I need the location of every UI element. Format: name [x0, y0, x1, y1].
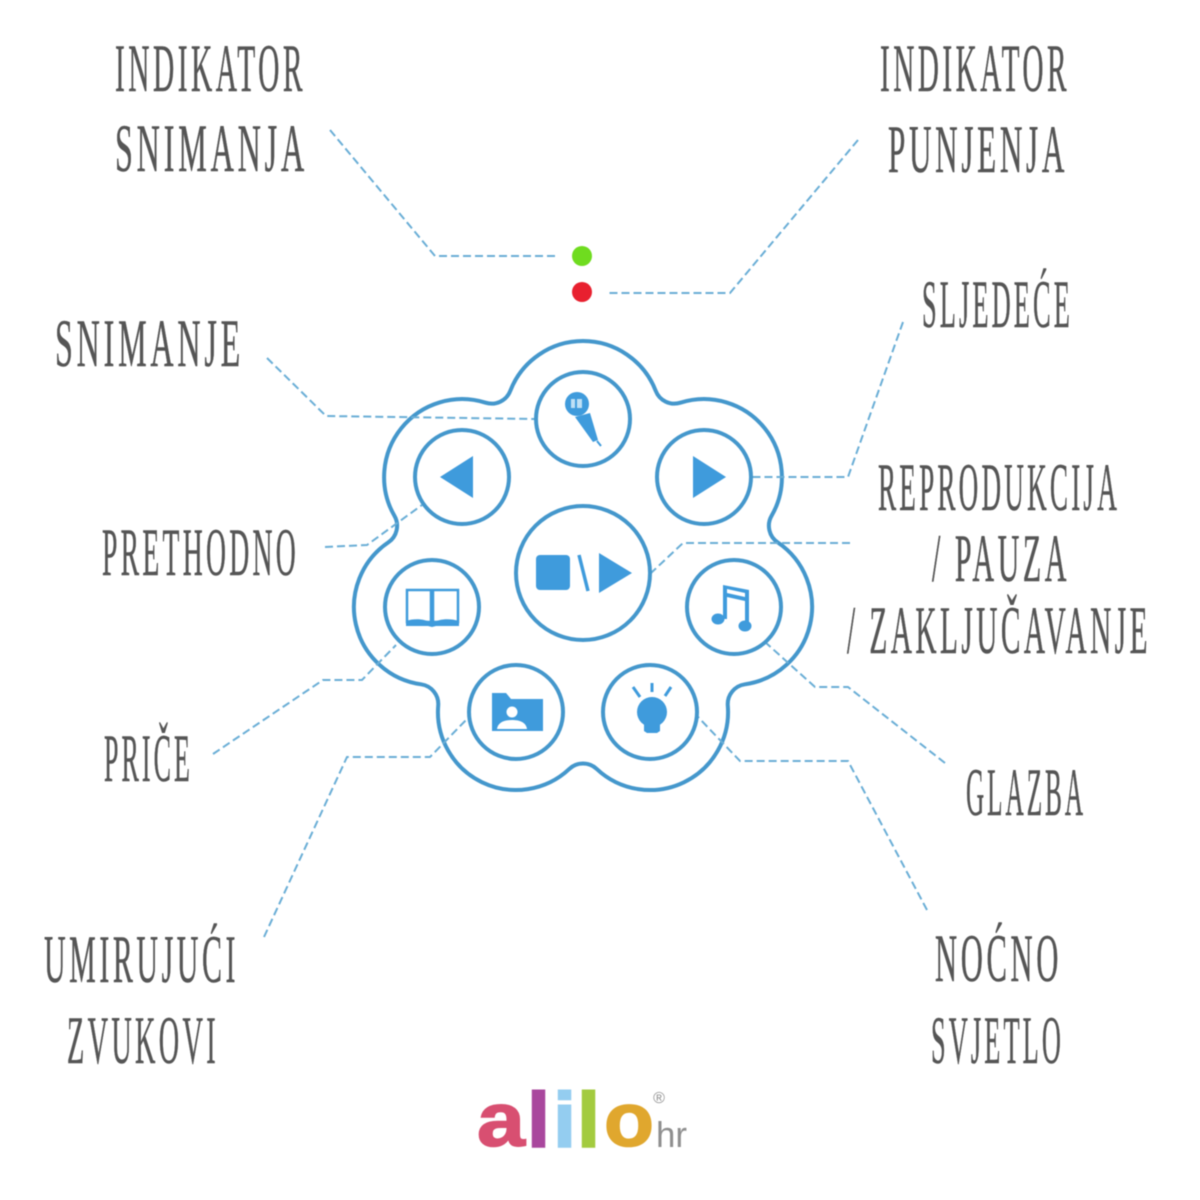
- logo: alilo.hr: a: [477, 1078, 526, 1163]
- label: night light: [931, 920, 1064, 1078]
- indicator: green recording LED: [572, 246, 592, 266]
- infographic: player controls diagram: INDIKATOR: [115, 30, 306, 106]
- logo: alilo.hr: o: [604, 1078, 654, 1163]
- infographic: player controls diagram: SNIMANJA: [115, 110, 308, 186]
- label: recording indicator: [115, 30, 308, 186]
- logo: alilo.hr: [477, 1078, 687, 1163]
- button: next: [657, 430, 751, 524]
- button: record with microphone icon: [536, 372, 630, 466]
- label: play / pause / lock: [847, 449, 1151, 668]
- infographic: player controls diagram: PRIČE: [104, 720, 193, 796]
- logo: alilo.hr: l: [578, 1078, 599, 1163]
- button: soothing sounds with folder icon: [469, 665, 563, 759]
- button: stories with book icon: [385, 560, 479, 654]
- flower-shaped device outline: [354, 341, 812, 790]
- button: previous: [415, 430, 509, 524]
- infographic: player controls diagram: UMIRUJUĆI: [44, 921, 239, 997]
- connector lines: [213, 130, 945, 937]
- indicator: red charging LED: [572, 282, 592, 302]
- infographic: player controls diagram: SNIMANJE: [55, 305, 244, 381]
- infographic: player controls diagram: PRETHODNO: [102, 514, 299, 590]
- logo: alilo.hr: l: [528, 1078, 549, 1163]
- button: music with note icon: [687, 560, 781, 654]
- button: play / pause / lock: [516, 506, 650, 640]
- label: charging indicator: [880, 30, 1070, 187]
- logo: alilo.hr: i: [554, 1078, 575, 1163]
- logo: alilo.hr: ®: [653, 1090, 665, 1107]
- infographic: player controls diagram: ZVUKOVI: [67, 1002, 219, 1078]
- logo: alilo.hr: hr: [656, 1114, 687, 1155]
- label: soothing sounds: [44, 921, 239, 1078]
- button: night light with bulb icon: [603, 665, 697, 759]
